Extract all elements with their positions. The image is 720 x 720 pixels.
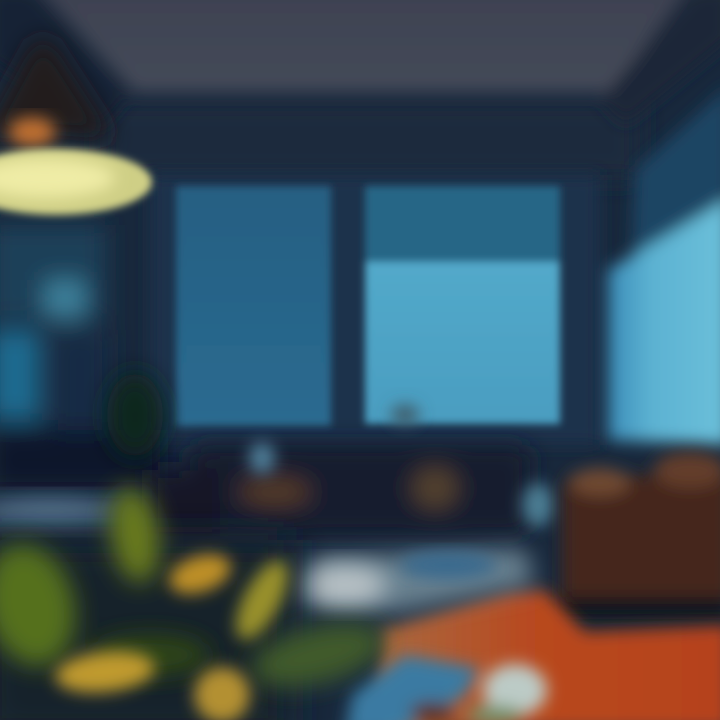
sofa cushions [249,405,554,527]
dark sofa [150,445,530,540]
ceiling [0,0,720,130]
rug [300,548,535,612]
orange floor [380,590,720,720]
window: center blind [365,186,560,424]
left wall windows [0,225,160,490]
pendant lamp [0,40,152,215]
foreground plant [0,484,391,720]
floor and rug [300,548,720,720]
lamp shade [0,40,115,140]
green leaves [0,484,391,699]
table top [0,498,290,720]
blue cushion [345,655,547,720]
right wall window [608,85,720,445]
glowing lamp base [0,149,152,215]
house plant in background [107,373,163,457]
brown armchair [555,452,720,619]
window: left blind [176,186,331,426]
yellow leaves [53,547,299,720]
